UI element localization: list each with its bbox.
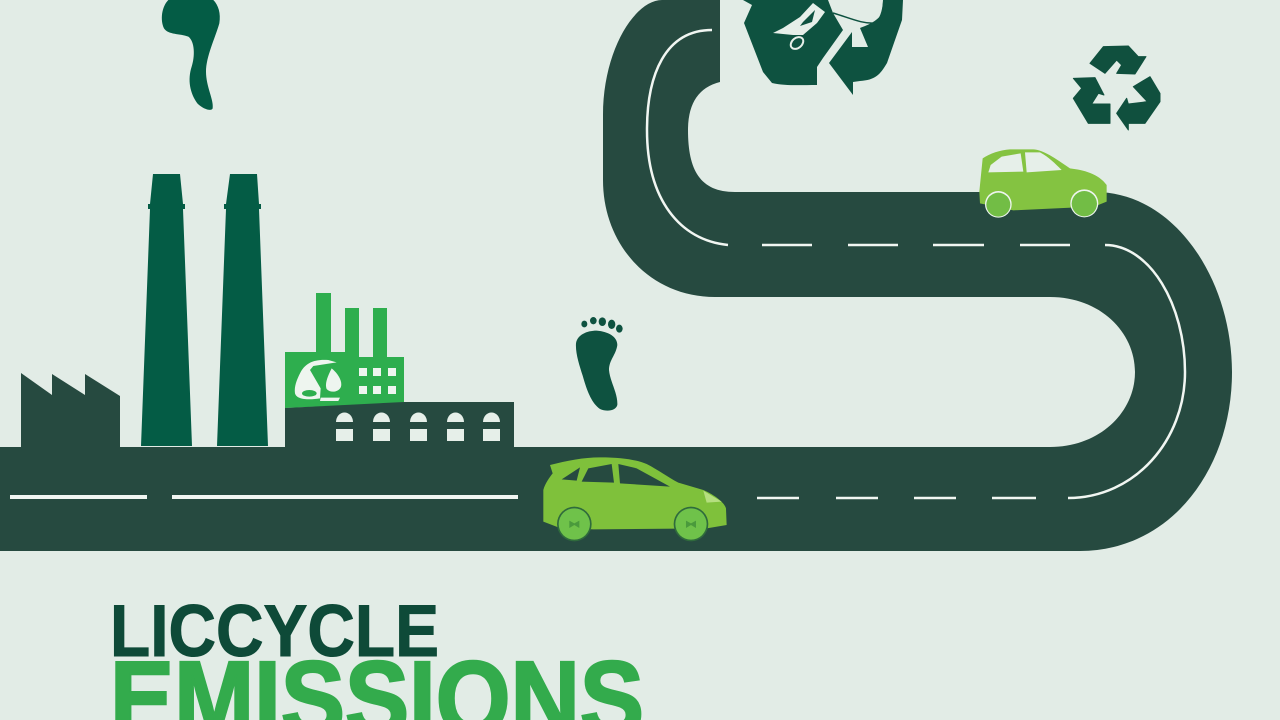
title: [110, 591, 644, 720]
winding road: [0, 0, 1232, 551]
road centre markings: [10, 30, 1185, 498]
wheels: [985, 191, 1012, 218]
dark building windows: [336, 413, 500, 441]
icon: smoke plume: [162, 0, 220, 110]
icon: footprint: [576, 317, 623, 411]
icon: green factory: [285, 293, 404, 408]
icon: dark factory building: [285, 402, 514, 447]
leaf flourish: [773, 3, 825, 35]
title line one: LICCYCLE: [110, 591, 439, 672]
icon: dark sawtooth factory: [21, 373, 120, 447]
globe emblem: [295, 360, 341, 401]
green factory windows: [359, 368, 396, 394]
icon: small recycling symbol: [1073, 46, 1160, 130]
wheels: [557, 507, 592, 541]
icon: green car on upper road: [979, 149, 1107, 218]
icon: green car on lower road: [543, 457, 727, 541]
icon: large recycling symbol: [743, 0, 903, 95]
icon: tall smokestacks: [141, 174, 268, 446]
